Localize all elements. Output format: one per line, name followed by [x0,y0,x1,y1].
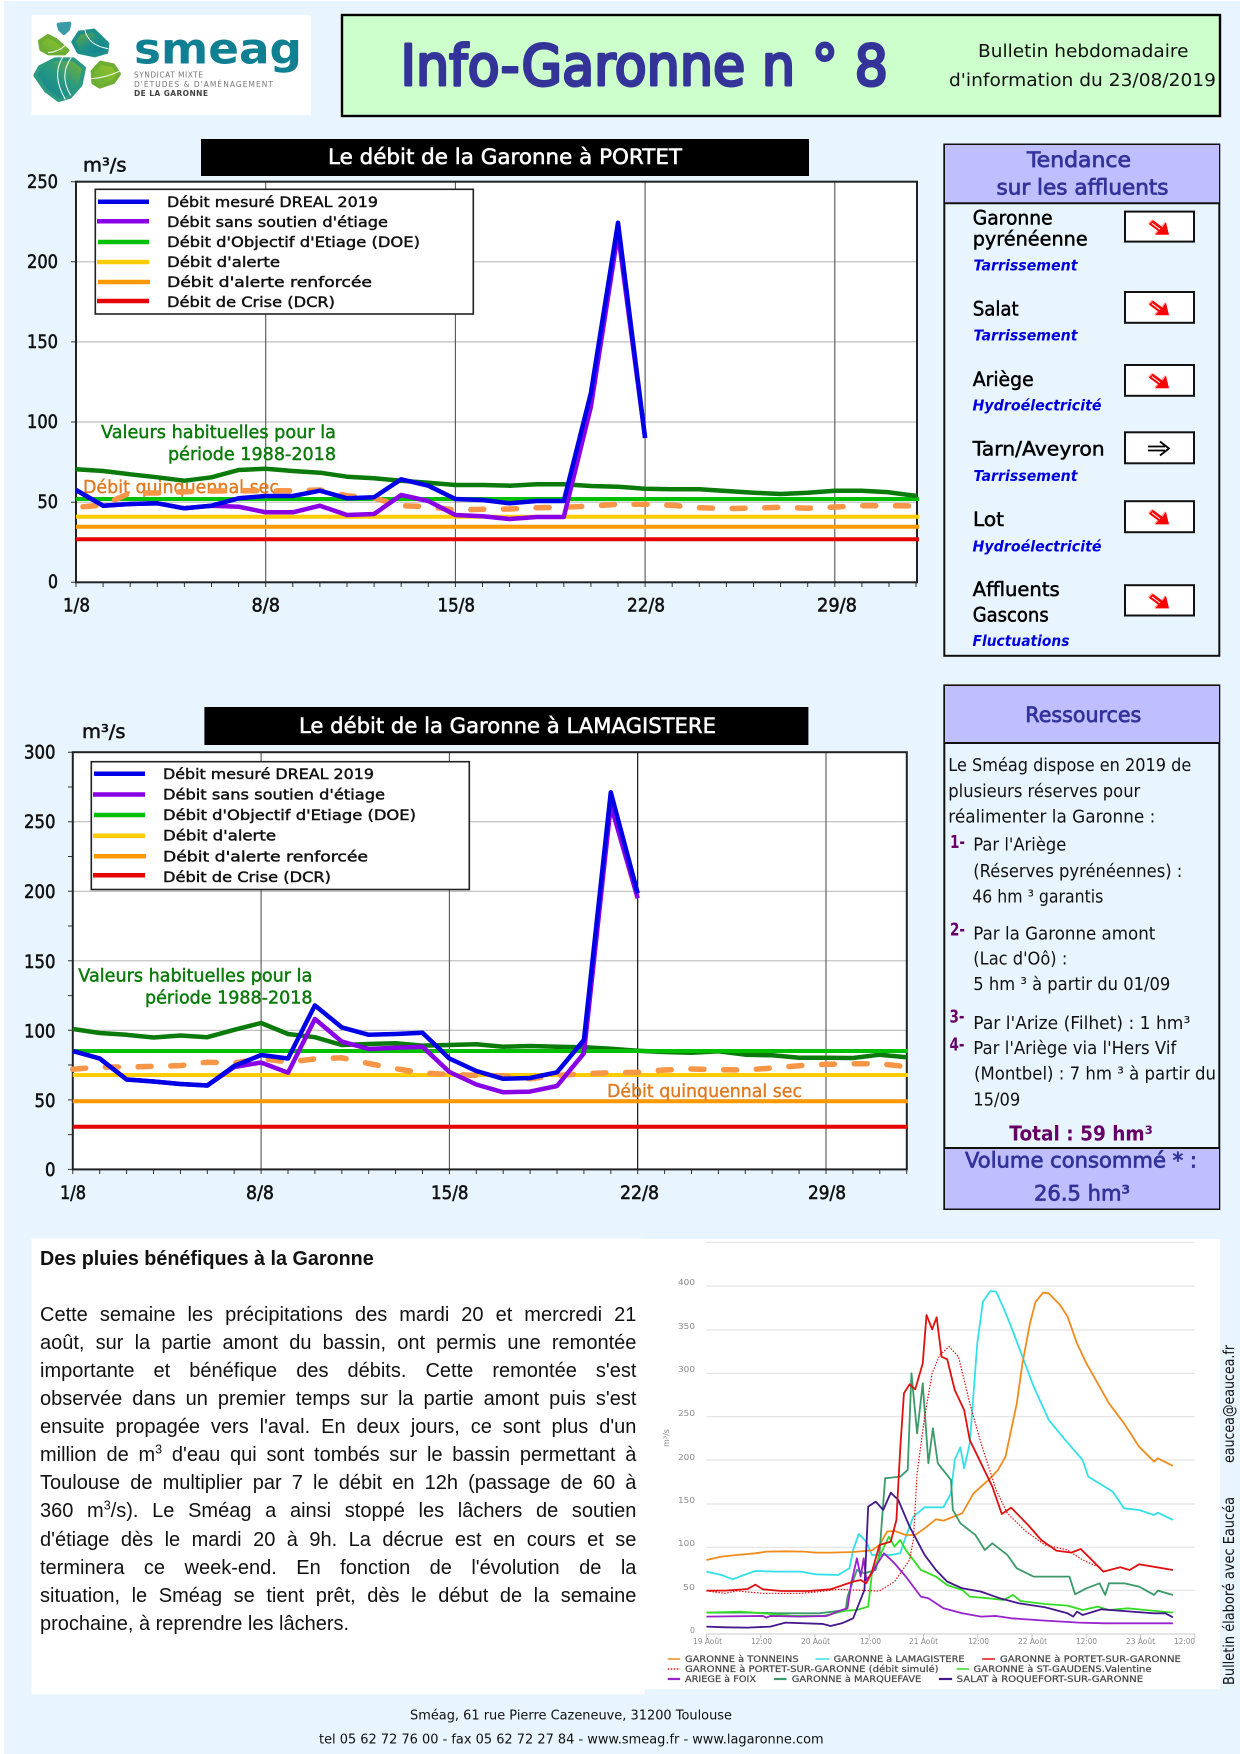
legend Portet: Débit mesuré DREAL 2019 [167,195,378,211]
hydrograph y labels [662,1278,695,1635]
series: habitual values [76,469,917,496]
legend Portet: Débit d'Objectif d'Etiage (DOE) [167,235,420,251]
article text: terminera ce week-end. En fonction de l'évolution de la [40,1557,636,1579]
resource 4: Par l'Ariège via l'Hers Vif [973,1039,1177,1059]
habitual values label: Valeurs habituelles pour la [101,422,336,443]
hydrograph x labels: 22 Août [1018,1637,1047,1646]
hydrograph y labels: 200 [678,1453,695,1462]
side credit: Bulletin élaboré avec Eaucéa [1220,1497,1238,1685]
hydrograph legend: GARONNE à PORTET-SUR-GARONNE [1000,1655,1181,1665]
hydrograph legend: GARONNE à LAMAGISTERE [834,1655,965,1665]
legend Lamagistere: Débit sans soutien d'étiage [163,788,385,804]
item: Lot: Hydroélectricité [972,538,1102,556]
legend Portet: Débit d'alerte renforcée [167,275,372,291]
hydrograph legend: SALAT à ROQUEFORT-SUR-GARONNE [957,1675,1144,1685]
panel heading [944,145,1220,203]
hydrograph curves [706,1291,1173,1628]
resource 4: (Montbel) : 7 hm ³ à partir du [974,1065,1216,1085]
resource 1: Par l'Ariège [973,836,1066,856]
article text: Toulouse de multiplier par 7 le débit en 12h (passage de 60 à [40,1472,636,1494]
article text: importante et bénéfique des débits. Cette remontée s'est [40,1360,636,1382]
article text [40,1304,636,1635]
total: Total : 59 hm³ [1009,1122,1153,1146]
resource 3: 3- [950,1008,964,1028]
logo tagline [134,71,273,98]
resource 3 [950,1008,1190,1034]
x axis labels: 15/8 [438,596,475,616]
quinquennal label: Débit quinquennal sec [83,477,279,498]
resource 4: 15/09 [973,1091,1020,1111]
bulletin subtitle: Bulletin hebdomadaire [978,41,1188,62]
y axis labels: 0 [48,572,58,593]
item: Lot: Lot [973,508,1004,531]
item: Tarn/Aveyron [972,432,1194,485]
x axis labels [60,1183,846,1204]
logo [32,15,311,115]
item: Tarn/Aveyron: Tarn/Aveyron [972,437,1105,460]
y axis labels: 150 [24,952,56,973]
item: Ariège [972,365,1194,415]
hydrograph x labels: 21 Août [909,1637,938,1646]
volume consumed [944,1148,1220,1208]
item: Salat [973,292,1194,345]
hydrograph legend: GARONNE à ST-GAUDENS.Valentine [974,1665,1152,1675]
hydrograph panel [644,1239,1220,1689]
chart title [204,707,808,745]
hydrograph legend: GARONNE à PORTET-SUR-GARONNE (débit simulé) [685,1664,939,1675]
panel heading: Ressources [1025,703,1141,727]
x axis labels: 22/8 [627,596,665,616]
habitual values label: Valeurs habituelles pour la [78,965,312,986]
y axis labels: 0 [45,1160,56,1181]
y axis labels: 100 [24,1022,56,1042]
article text: août, sur la partie amont du bassin, ont permis une remontée [40,1332,636,1354]
x axis labels: 29/8 [817,596,857,616]
article text: 360 m3/s). Le Sméag a ainsi stoppé les lâchers de soutien [40,1499,636,1522]
panel: resources [944,685,1220,1209]
hydrograph y labels: 0 [690,1626,695,1635]
hydrograph y labels: 400 [678,1278,695,1287]
hydrograph y labels: 350 [678,1322,695,1331]
x axis labels: 15/8 [431,1183,468,1204]
resource 3: Par l'Arize (Filhet) : 1 hm³ [973,1014,1190,1034]
hydrograph y labels: 100 [678,1539,695,1548]
legend Portet: Débit d'alerte [167,255,280,271]
hydrograph legend: GARONNE à MARQUEFAVE [792,1675,922,1685]
DOE line [73,1049,908,1053]
chart title: Le débit de la Garonne à LAMAGISTERE [299,714,716,738]
side credit [1220,1344,1238,1685]
threshold lines [76,499,919,539]
habitual values label [101,422,336,465]
legend Lamagistere: Débit d'Objectif d'Etiage (DOE) [163,808,416,824]
article text: situation, le Sméag se tient prêt, dès le début de la semaine [40,1585,636,1607]
legend Portet [95,189,473,314]
article background [32,1238,644,1694]
article text: observée dans un premier temps sur la partie amont puis s'est [40,1388,636,1410]
bulletin subtitle [949,41,1216,91]
y axis labels: 50 [38,492,58,513]
article heading: Des pluies bénéfiques à la Garonne [40,1248,374,1270]
panel: tributaries trend [944,144,1220,656]
resource 1: (Réserves pyrénéennes) : [973,862,1182,882]
hydrograph x labels [693,1637,1195,1646]
series: quinquennal dashed [73,1058,907,1079]
logo wordmark: smeag [134,25,302,75]
resource 2: Par la Garonne amont [973,924,1155,944]
hydrograph x labels: 12:00 [751,1637,772,1646]
article text: ensuite propagée vers l'aval. En deux jours, ce sont plus d'un [40,1416,636,1438]
y axis labels [24,742,56,1181]
hydrograph x labels: 23 Août [1126,1637,1155,1646]
resource 1: 1- [950,833,965,853]
resource 1 [950,833,1182,908]
bulletin subtitle: d'information du 23/08/2019 [949,70,1216,91]
legend Portet: Débit sans soutien d'étiage [167,215,388,231]
habitual values label: période 1988-2018 [168,444,336,465]
hydrograph axis [706,1634,1195,1639]
resource 4 [950,1036,1216,1111]
habitual values label [78,965,312,1009]
legend Lamagistere: Débit mesuré DREAL 2019 [163,767,374,783]
article text: prochaine, à reprendre les lâchers. [40,1613,349,1635]
legend Lamagistere: Débit de Crise (DCR) [163,870,331,886]
y axis labels: 200 [24,882,56,903]
item: Garonne pyrénéenne: Garonne [973,207,1053,230]
legend Lamagistere: Débit d'alerte renforcée [163,849,368,865]
resource 4: 4- [950,1036,964,1056]
panel: chart Portet [27,139,919,616]
series: habitual values [73,1023,907,1058]
item: Salat: Salat [973,297,1019,320]
hydrograph legend: ARIEGE à FOIX [685,1675,756,1685]
unit label: m³/s [83,156,126,176]
resource 2: (Lac d'Oô) : [973,950,1067,970]
article text: Cette semaine les précipitations des mardi 20 et mercredi 21 [40,1304,636,1326]
logo tagline: DE LA GARONNE [134,89,208,98]
resource 2: 2- [950,920,965,940]
habitual values label: période 1988-2018 [145,988,312,1009]
x axis labels: 22/8 [620,1183,659,1204]
hydrograph x labels: 12:00 [968,1637,989,1646]
item: Lot [972,501,1194,556]
x axis labels: 29/8 [808,1183,846,1204]
x axis labels: 1/8 [63,596,90,616]
x axis labels: 1/8 [60,1183,86,1204]
resource 2 [950,920,1170,995]
y axis labels: 250 [27,172,58,193]
x axis labels: 8/8 [246,1183,274,1204]
hydrograph legend: GARONNE à TONNEINS [685,1655,799,1665]
hydrograph x labels: 20 Août [801,1637,830,1646]
article text: million de m3 d'eau qui sont tombés sur le bassin permettant à [40,1443,636,1466]
article text: d'étiage dès le mardi 20 à 9h. La décrue est en cours et se [40,1528,636,1550]
chart title [201,139,809,176]
header banner [342,15,1220,116]
intro text [948,756,1191,828]
footer: Sméag, 61 rue Pierre Cazeneuve, 31200 Toulouse [410,1708,732,1724]
series: measured [76,223,645,508]
panel heading [944,686,1220,743]
y axis labels: 200 [27,252,58,273]
hydrograph grid [706,1242,1195,1590]
hydrograph y labels: 300 [678,1365,695,1374]
hydrograph legend [668,1655,1181,1685]
series: measured [73,792,638,1086]
hydrograph x labels: 12:00 [860,1637,881,1646]
title: Info-Garonne n ° 8 [400,34,888,99]
hydrograph y labels: 50 [683,1583,695,1592]
panel: chart Lamagistere [24,707,908,1204]
intro text: Le Sméag dispose en 2019 de [948,756,1191,776]
chart title: Le débit de la Garonne à PORTET [328,145,682,169]
footer [319,1708,824,1748]
volume consumed: Volume consommé * : [965,1148,1197,1172]
item: Ariège: Hydroélectricité [972,397,1102,415]
volume consumed: 26.5 hm³ [1034,1182,1130,1206]
hydrograph y labels: 250 [678,1409,695,1418]
logo tagline: SYNDICAT MIXTE [134,71,203,80]
series: without support [76,233,645,519]
threshold lines [73,1075,908,1127]
item: Affluents Gascons: Fluctuations [972,632,1070,650]
y axis labels: 250 [24,812,56,833]
icon: pebbles [35,24,119,100]
item: Ariège: Ariège [973,368,1034,391]
resource 1: 46 hm ³ garantis [972,888,1103,908]
x axis labels: 8/8 [252,596,280,616]
hydrograph x labels: 12:00 [1076,1637,1097,1646]
series: quinquennal dashed [83,490,917,510]
item: Garonne pyrénéenne [973,207,1194,274]
line chart Lamagistere [68,752,908,1174]
legend Portet: Débit de Crise (DCR) [167,295,335,311]
intro text: plusieurs réserves pour [948,782,1141,802]
item: Affluents Gascons: Affluents [973,578,1060,601]
item: Affluents Gascons: Gascons [973,603,1049,626]
item: Salat: Tarrissement [974,327,1078,345]
unit label: m³/s [82,722,126,743]
y axis labels: 50 [34,1091,56,1112]
line chart Portet [71,182,919,587]
resource 2: 5 hm ³ à partir du 01/09 [973,975,1170,995]
side credit: eaucea@eaucea.fr [1220,1344,1238,1463]
intro text: réalimenter la Garonne : [948,808,1155,828]
y axis labels: 150 [27,332,58,353]
hydrograph x labels: 12:00 [1174,1637,1195,1646]
item: Garonne pyrénéenne: Tarrissement [974,256,1078,274]
footer: tel 05 62 72 76 00 - fax 05 62 72 27 84 - www.smeag.fr - www.lagaronne.com [319,1732,824,1748]
panel heading: Tendance [1026,148,1131,172]
hydrograph x labels: 19 Août [693,1637,722,1646]
x axis labels [63,596,857,616]
y axis labels: 300 [24,742,56,764]
hydrograph y labels: 150 [678,1496,695,1505]
y axis labels [27,172,58,593]
item: Affluents Gascons [972,578,1194,650]
hydrograph y labels: m³/s [662,1429,671,1447]
panel heading: sur les affluents [996,175,1168,199]
quinquennal label: Débit quinquennal sec [607,1081,802,1102]
logo tagline: D'ÉTUDES & D'AMÉNAGEMENT [134,80,273,89]
series: without support [73,805,638,1092]
y axis labels: 100 [27,412,58,433]
legend Lamagistere [91,762,469,890]
item: Garonne pyrénéenne: pyrénéenne [973,227,1088,250]
legend Lamagistere: Débit d'alerte [163,828,276,844]
item: Tarn/Aveyron: Tarrissement [974,467,1078,485]
